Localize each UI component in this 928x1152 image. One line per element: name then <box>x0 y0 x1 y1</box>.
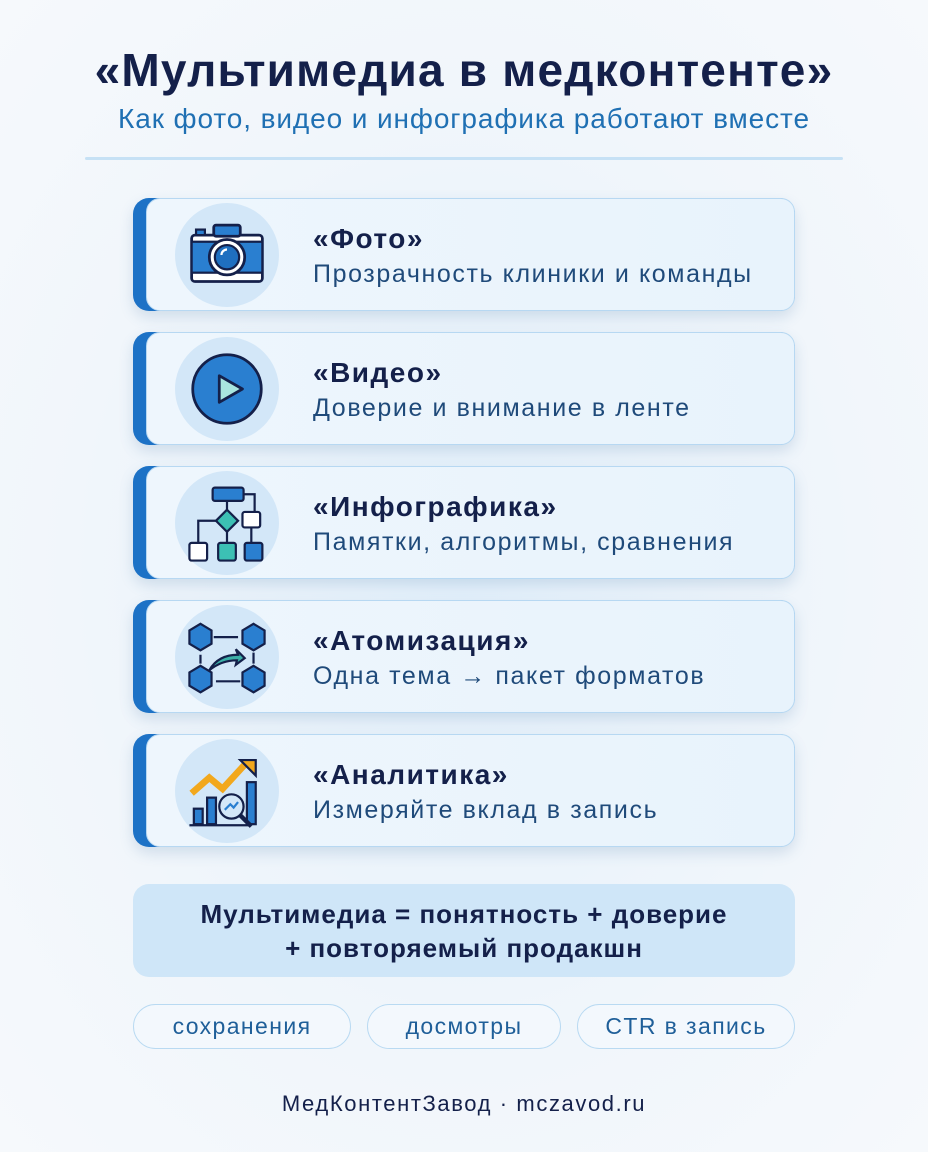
heading: «Видео» <box>313 357 443 388</box>
title: «Мультимедиа в медконтенте» <box>95 44 833 96</box>
card: photo <box>133 198 795 311</box>
subtitle: Как фото, видео и инфографика работают вместе <box>118 103 810 134</box>
text: Прозрачность клиники и команды <box>313 260 753 288</box>
icon: play <box>175 337 279 441</box>
heading: «Атомизация» <box>313 625 530 656</box>
summary box: + повторяемый продакшн <box>285 933 643 963</box>
heading: «Фото» <box>313 223 424 254</box>
card: atomization <box>133 600 795 713</box>
text: Измеряйте вклад в запись <box>313 796 658 824</box>
pill: CTR: CTR в запись <box>605 1013 767 1039</box>
text: Одна тема → пакет форматов <box>313 662 705 690</box>
pill: CTR <box>577 1004 795 1049</box>
pill: views: досмотры <box>406 1013 522 1039</box>
card: infographic <box>133 466 795 579</box>
text: Памятки, алгоритмы, сравнения <box>313 528 734 556</box>
heading: «Инфографика» <box>313 491 558 522</box>
pill: saves: сохранения <box>173 1013 311 1039</box>
footer: МедКонтентЗавод · mczavod.ru <box>282 1091 646 1116</box>
pill: views <box>367 1004 561 1049</box>
card: video <box>133 332 795 445</box>
heading: «Аналитика» <box>313 759 509 790</box>
pill: saves <box>133 1004 351 1049</box>
card: analytics <box>133 734 795 847</box>
summary box <box>133 884 795 977</box>
icon: flowchart <box>175 471 279 575</box>
icon: chart <box>175 739 279 843</box>
icon: camera <box>175 203 279 307</box>
text: Доверие и внимание в ленте <box>313 394 691 422</box>
summary box: Мультимедиа = понятность + доверие <box>200 899 728 929</box>
icon: cubes <box>175 605 279 709</box>
